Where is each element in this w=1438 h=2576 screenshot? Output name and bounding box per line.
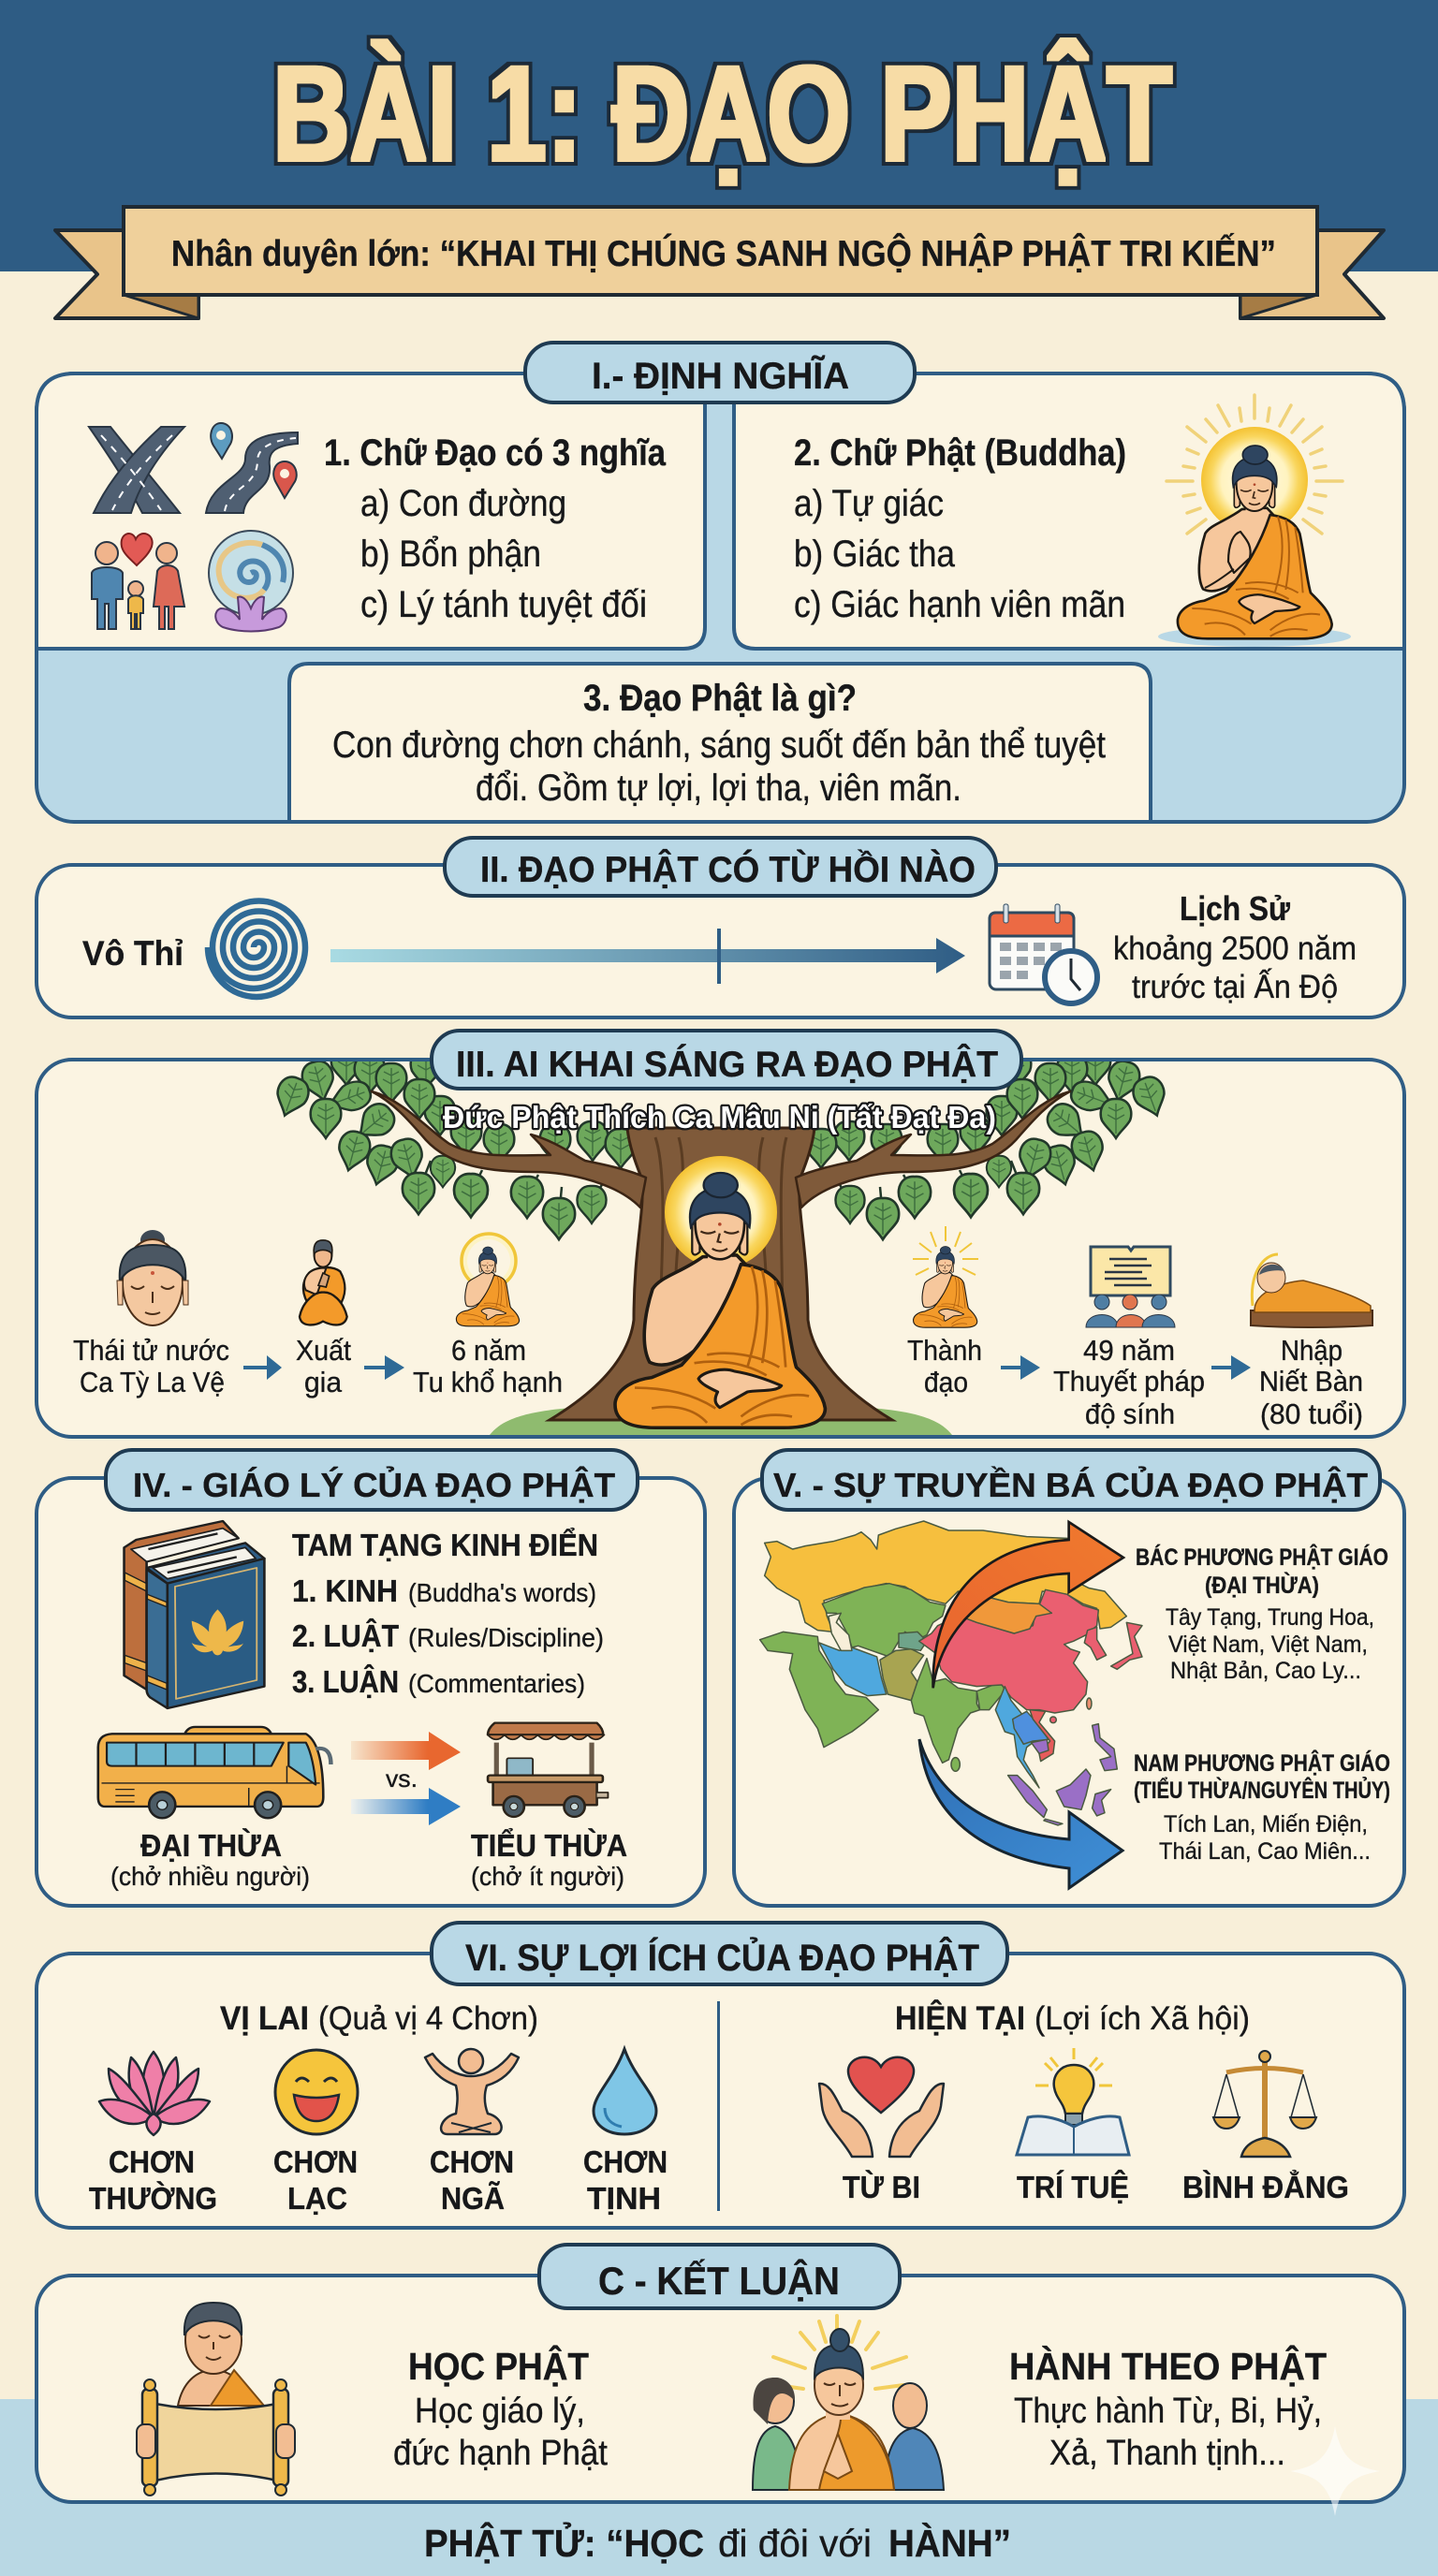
text: southern school: Tích Lan, Miến Điện, (1164, 1811, 1368, 1837)
icon: calendar and clock (990, 904, 1097, 1003)
icon: water drop (594, 2049, 656, 2134)
heading: V (762, 1450, 1380, 1510)
text: four qualities (89, 2144, 668, 2216)
icon: spiral (208, 900, 305, 997)
text: timeline labels left (73, 1334, 563, 1398)
text: three baskets (292, 1528, 604, 1699)
text: three benefits: TỪ BI (843, 2170, 920, 2204)
heading: V: V. - SỰ TRUYỀN BÁ CỦA ĐẠO PHẬT (773, 1465, 1368, 1504)
text: vehicles: TIỂU THỪA (471, 1828, 627, 1863)
icon: Buddha with followers (753, 2316, 944, 2490)
icon: prince head (117, 1230, 188, 1325)
text: northern school: Nhật Bản, Cao Ly... (1170, 1658, 1361, 1684)
text: study: Học giáo lý, (415, 2392, 585, 2431)
text: three baskets: 3. LUẬN (292, 1664, 399, 1699)
text: timeline labels left: Thái tử nước (73, 1334, 229, 1367)
text: timeline labels right: Thuyết pháp (1053, 1365, 1205, 1398)
text: timeline labels left: 6 năm (451, 1334, 526, 1367)
text: timeline labels left: Xuất (296, 1334, 351, 1367)
text: timeline labels right: đạo (924, 1366, 968, 1398)
text: timeline labels right: Nhập (1281, 1334, 1343, 1367)
text: future heading (220, 2000, 538, 2037)
text: Chu Dao (324, 432, 667, 625)
icon: six years ascetic (456, 1234, 520, 1326)
text: timeline labels right: độ sính (1085, 1398, 1175, 1430)
illustration: central Buddha (615, 1156, 825, 1427)
panel: VI benefits (37, 1923, 1404, 2228)
text: vehicles: ĐẠI THỪA (140, 1828, 282, 1863)
text: what is Buddhism: 3. Đạo Phật là gì? (583, 678, 857, 719)
arrow: timeline (330, 929, 965, 984)
text: three benefits: BÌNH ĐẲNG (1182, 2170, 1349, 2204)
text: present heading: (Lợi ích Xã hội) (1034, 2000, 1250, 2037)
arrow: orange (351, 1732, 461, 1770)
text: Chu Phat (794, 432, 1126, 625)
text: three baskets: 1. KINH (292, 1573, 398, 1608)
icon: heart in hands (819, 2057, 944, 2157)
ribbon text: Nhân duyên lớn: “KHAI THỊ CHÚNG SANH NGỘ NHẬP PHẬT TRI KIẾN” (171, 232, 1276, 274)
text: what is Buddhism (332, 678, 1106, 809)
text: timeline labels right: 49 năm (1083, 1334, 1175, 1367)
text: Lich Su (1113, 889, 1357, 1005)
footer motto: PHẬT TỬ: “HỌC (424, 2522, 704, 2565)
heading: VI (432, 1923, 1007, 1984)
text: southern school: Thái Lan, Cao Miên... (1159, 1838, 1371, 1865)
panel: V spread (734, 1450, 1404, 1906)
text: three baskets: (Rules/Discipline) (408, 1623, 604, 1652)
text: Chu Phat: b) Giác tha (794, 534, 956, 575)
heading: C (539, 2245, 900, 2308)
icon: monk with scroll (137, 2303, 295, 2496)
text: Chu Dao: c) Lý tánh tuyệt đối (360, 584, 647, 625)
subtitle: Đức Phật Thích Ca Mâu Ni (Tất Đạt Đa) (443, 1100, 996, 1134)
icon: bulb and book (1017, 2048, 1129, 2155)
icon: teaching board and audience (1086, 1247, 1175, 1327)
panel: II timeline (37, 838, 1404, 1017)
icon: monk praying (300, 1240, 347, 1325)
text: timeline labels right (907, 1334, 1363, 1430)
panel: I definitions (37, 343, 1404, 822)
text: Chu Dao: a) Con đường (360, 483, 566, 524)
text: what is Buddhism: Con đường chơn chánh, sáng suốt đến bản thể tuyệt (332, 724, 1106, 766)
text: present heading (895, 1999, 1250, 2037)
text: three benefits (843, 2170, 1349, 2204)
heading: II: II. ĐẠO PHẬT CÓ TỪ HỒI NÀO (480, 849, 976, 890)
heading: IV (106, 1450, 638, 1510)
label: vs: vs. (386, 1764, 418, 1793)
icon: winding road with pins (206, 423, 298, 513)
text: study: HỌC PHẬT (408, 2345, 589, 2388)
text: practice: HÀNH THEO PHẬT (1009, 2345, 1327, 2388)
heading: VI: VI. SỰ LỢI ÍCH CỦA ĐẠO PHẬT (465, 1936, 979, 1979)
text: timeline labels left: Ca Tỳ La Vệ (80, 1366, 225, 1398)
heading: I (525, 343, 915, 402)
text: Lich Su: Lịch Sử (1180, 889, 1291, 928)
text: three benefits: TRÍ TUỆ (1017, 2170, 1129, 2204)
icon: scripture books (125, 1521, 264, 1708)
text: timeline labels left: Tu khổ hạnh (413, 1366, 563, 1398)
text: study: đức hạnh Phật (393, 2434, 608, 2473)
text: three baskets: TAM TẠNG KINH ĐIỂN (292, 1528, 598, 1562)
icon: crossing roads (89, 427, 184, 513)
text: study (393, 2345, 608, 2473)
icon: Buddha with rays (1158, 395, 1351, 647)
text: three baskets: (Commentaries) (408, 1669, 585, 1698)
icon: enlightenment figure (913, 1226, 978, 1327)
text: Chu Phat: 2. Chữ Phật (Buddha) (794, 432, 1126, 474)
text: northern school (1136, 1543, 1388, 1684)
sparkle mark (1290, 2426, 1380, 2516)
heading: III: III. AI KHAI SÁNG RA ĐẠO PHẬT (456, 1044, 998, 1085)
text: four qualities: NGÃ (441, 2181, 505, 2216)
text: future heading: VỊ LAI (220, 2000, 309, 2037)
arrow: step 4 (1211, 1355, 1251, 1380)
icon: reclining Buddha (1251, 1254, 1372, 1327)
footer motto (424, 2522, 1011, 2565)
arrow: step 2 (364, 1355, 404, 1380)
text: northern school: Việt Nam, Việt Nam, (1168, 1632, 1368, 1658)
text: northern school: (ĐẠI THỪA) (1205, 1571, 1319, 1599)
text: vehicles (110, 1828, 627, 1891)
text: practice: Thực hành Từ, Bi, Hỷ, (1014, 2392, 1322, 2431)
text: four qualities: TỊNH (587, 2181, 661, 2216)
text: Chu Dao: b) Bổn phận (360, 534, 541, 575)
text: four qualities: LẠC (287, 2181, 347, 2216)
text: Chu Phat: c) Giác hạnh viên mãn (794, 584, 1125, 625)
icon: cart (488, 1723, 608, 1817)
icon: meditating figure (425, 2049, 519, 2134)
panel: IV doctrine (37, 1450, 705, 1906)
illustration: Bodhi tree (271, 1046, 1171, 1435)
arrow: step 1 (243, 1355, 282, 1380)
text: timeline labels right: (80 tuổi) (1260, 1398, 1363, 1430)
arrow: southern spread (919, 1739, 1123, 1888)
text: three baskets: 2. LUẬT (292, 1618, 399, 1653)
text: Chu Dao: 1. Chữ Đạo có 3 nghĩa (324, 432, 667, 474)
arrow: blue (351, 1788, 461, 1825)
title: BÀI 1: ĐẠO PHẬT (272, 38, 1172, 189)
text: southern school: NAM PHƯƠNG PHẬT GIÁO (1134, 1749, 1390, 1777)
icon: family (92, 534, 184, 629)
text: northern school: BÁC PHƯƠNG PHẬT GIÁO (1136, 1543, 1388, 1571)
text: vehicles: (chở ít người) (471, 1862, 624, 1891)
text: four qualities: CHƠN (430, 2144, 514, 2179)
footer motto: HÀNH” (888, 2522, 1011, 2565)
icon: spiral and lotus (209, 531, 293, 631)
text: Chu Phat: a) Tự giác (794, 483, 944, 524)
heading: I: I.- ĐỊNH NGHĨA (592, 354, 849, 397)
text: what is Buddhism: đổi. Gồm tự lợi, lợi tha, viên mãn. (476, 768, 961, 809)
heading: IV: IV. - GIÁO LÝ CỦA ĐẠO PHẬT (133, 1465, 615, 1504)
panel: conclusion (37, 2245, 1404, 2502)
icon: bus (98, 1727, 330, 1818)
label: Vo Thi: Vô Thỉ (82, 934, 183, 973)
text: practice (1009, 2345, 1327, 2473)
text: vehicles: (chở nhiều người) (110, 1862, 310, 1891)
heading: II (445, 838, 996, 896)
panel: III founder (37, 1031, 1404, 1437)
footer motto: đi đôi với (718, 2522, 872, 2565)
text: future heading: (Quả vị 4 Chơn) (318, 2000, 538, 2037)
ribbon banner (55, 207, 1384, 318)
text: three baskets: (Buddha's words) (408, 1578, 596, 1607)
text: four qualities: THƯỜNG (89, 2181, 217, 2216)
map: Asia (760, 1521, 1142, 1825)
text: four qualities: CHƠN (273, 2144, 358, 2179)
text: four qualities: CHƠN (583, 2144, 668, 2179)
text: northern school: Tây Tạng, Trung Hoa, (1166, 1604, 1374, 1631)
text: Lich Su: trước tại Ấn Độ (1132, 968, 1338, 1005)
icon: lotus (99, 2052, 210, 2135)
text: timeline labels right: Thành (907, 1334, 982, 1367)
text: present heading: HIỆN TẠI (895, 1999, 1025, 2037)
icon: smiley (275, 2050, 358, 2134)
text: practice: Xả, Thanh tịnh... (1049, 2434, 1285, 2473)
text: timeline labels right: Niết Bàn (1259, 1365, 1363, 1398)
text: southern school (1134, 1749, 1390, 1865)
text: Lich Su: khoảng 2500 năm (1113, 930, 1357, 967)
heading: III (432, 1031, 1021, 1089)
arrow: step 3 (1001, 1355, 1040, 1380)
text: timeline labels left: gia (304, 1366, 343, 1398)
text: four qualities: CHƠN (109, 2144, 195, 2179)
heading: C: C - KẾT LUẬN (598, 2258, 840, 2303)
icon: scales (1213, 2051, 1316, 2157)
